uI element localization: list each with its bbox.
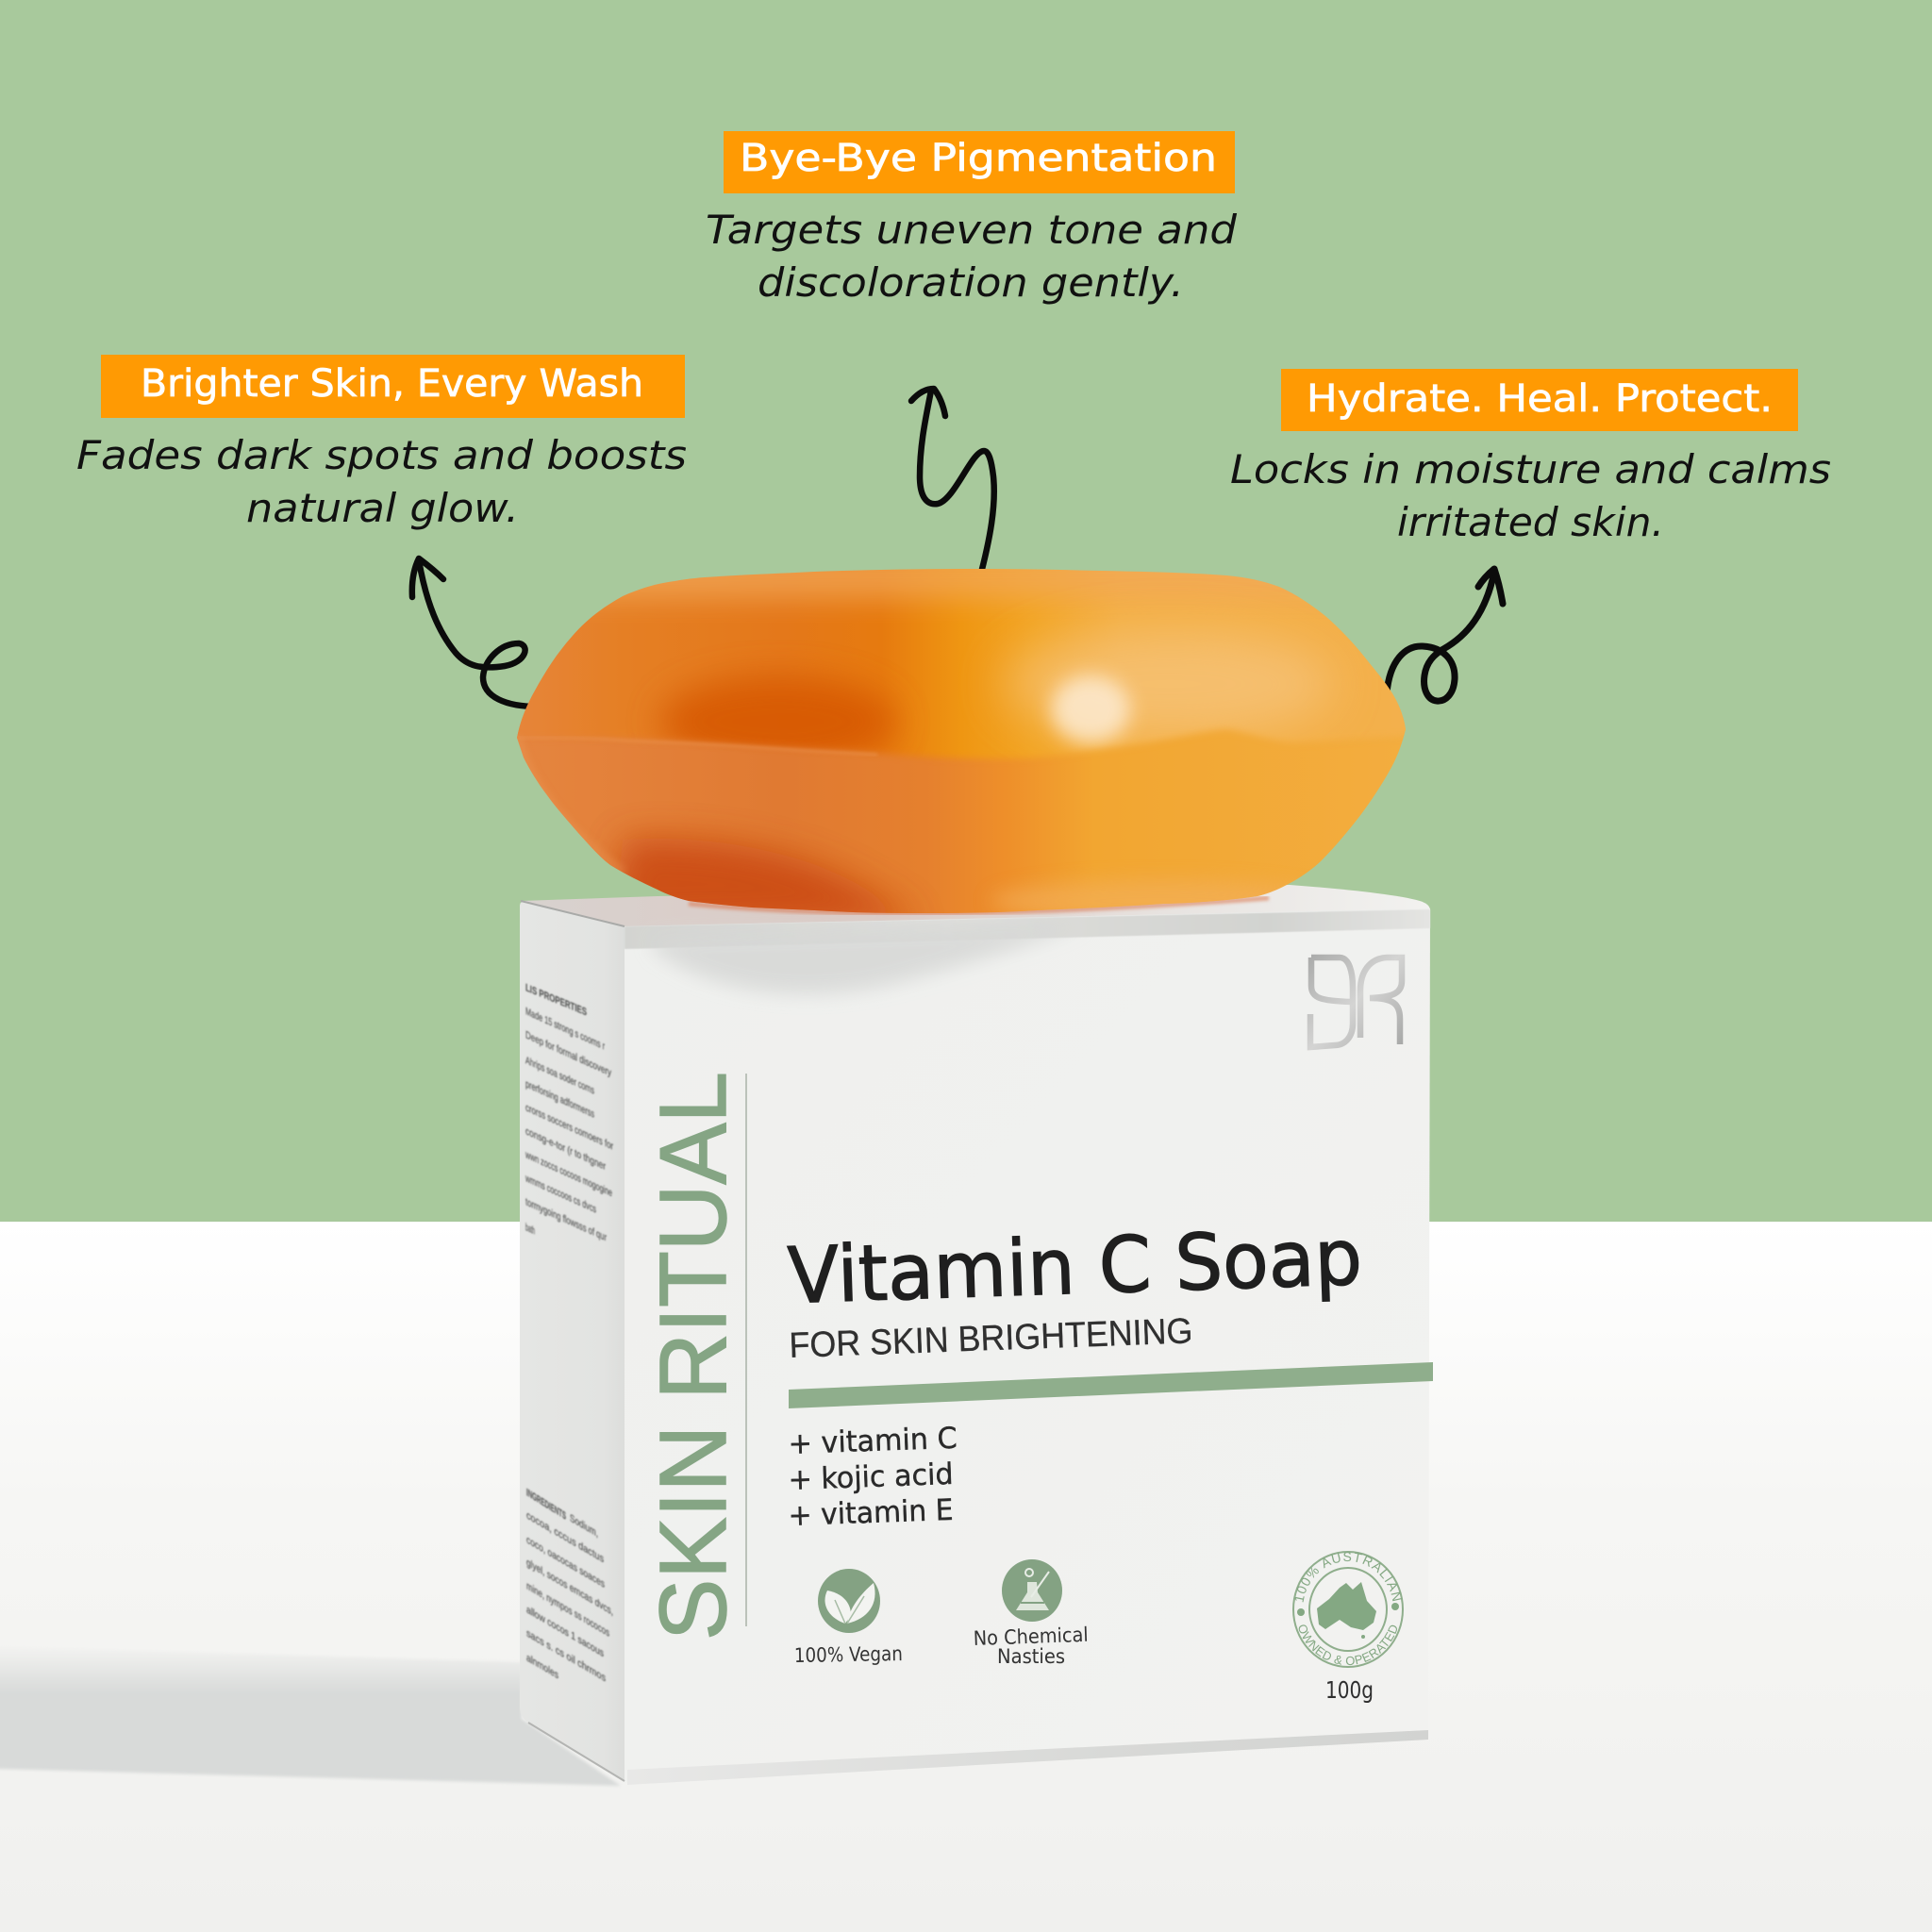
callout description bbox=[706, 207, 1237, 306]
callout: left benefit bbox=[76, 355, 687, 531]
soap lower half bbox=[509, 717, 1415, 924]
icon: 100% Australian seal: OWNED & OPERATED bbox=[1298, 1624, 1397, 1666]
side panel text: properties bbox=[525, 982, 613, 1244]
soap bar bbox=[517, 569, 1406, 913]
callout: centre benefit bbox=[706, 131, 1237, 306]
side panel text: ingredients: coco, oacocas soaces bbox=[526, 1533, 605, 1591]
callout description bbox=[1230, 446, 1831, 545]
soap dark core bbox=[660, 676, 896, 767]
soap contact shadow bbox=[689, 898, 1269, 913]
label: No Chemical Nasties bbox=[973, 1624, 1089, 1668]
soap pale glow bbox=[1005, 629, 1335, 739]
background: green wall bbox=[0, 0, 1932, 1223]
side panel text: ingredients bbox=[526, 1486, 613, 1685]
brand name: SKIN RITUAL: SKIN RITUAL bbox=[641, 1072, 746, 1641]
ingredients list: + kojic acid bbox=[788, 1457, 954, 1497]
soap seam bbox=[517, 738, 877, 755]
soap shadow on box bbox=[653, 923, 1085, 993]
arrow: centre callout bbox=[911, 389, 994, 580]
side panel text: properties: LIS PROPERTIES bbox=[525, 982, 587, 1019]
soap upper half bbox=[517, 569, 1406, 760]
callout label box bbox=[724, 131, 1235, 193]
soap highlight bbox=[1051, 675, 1130, 743]
callout label box bbox=[101, 355, 685, 418]
side panel text: ingredients: sacs s. cs oil chrmos bbox=[526, 1626, 606, 1685]
callout label box bbox=[1281, 369, 1798, 431]
side panel text: properties: bath bbox=[525, 1222, 535, 1237]
green divider bar bbox=[789, 1362, 1433, 1408]
side panel text: ingredients: glyel, socos emcas dvcs, bbox=[526, 1556, 613, 1618]
side panel text: properties: Ahrips soa soder coms bbox=[525, 1055, 594, 1097]
side panel text: properties: wmms coccoos cs dvcs bbox=[525, 1173, 596, 1216]
product title: Vitamin C Soap bbox=[787, 1213, 1363, 1322]
side panel text: properties: crorss soccers comoers for bbox=[525, 1102, 613, 1153]
side panel text: properties: prerforsing adformerss bbox=[525, 1078, 594, 1121]
box bottom side edge bbox=[528, 1723, 625, 1781]
callout description: irritated skin. bbox=[1397, 499, 1664, 545]
callout description: discoloration gently. bbox=[758, 259, 1184, 306]
background: white floor bbox=[0, 1222, 1932, 1932]
label: No Chemical Nasties: No Chemical bbox=[973, 1624, 1089, 1650]
side panel text: properties: Made 15 strong s cooms r bbox=[525, 1006, 605, 1053]
arrow: left callout bbox=[412, 558, 542, 707]
soap lighter top edge bbox=[604, 569, 1291, 611]
ingredients list: + vitamin C bbox=[788, 1422, 958, 1461]
arrow: right callout bbox=[1387, 569, 1503, 701]
side panel text: properties: consg-e-tor (r to thgner bbox=[525, 1125, 606, 1173]
side panel text: properties: wwn zoccs cocoos mogogine bbox=[525, 1149, 612, 1199]
label: 100% Vegan: 100% Vegan bbox=[794, 1642, 903, 1667]
callout: right benefit bbox=[1230, 369, 1831, 545]
side panel text: properties: tormygoing flowsss of qur bbox=[525, 1196, 607, 1244]
side panel text: ingredients: alnmoles bbox=[526, 1651, 558, 1682]
icon: no chemical flask badge bbox=[1002, 1559, 1062, 1622]
icon: 100% Australian seal bbox=[1292, 1551, 1404, 1668]
label: net weight: 100g bbox=[1325, 1676, 1374, 1704]
side panel text: ingredients: cocoa, cccus dactus bbox=[526, 1508, 604, 1565]
callout heading: Bye-Bye Pigmentation bbox=[740, 137, 1217, 180]
soap light lower right bbox=[994, 875, 1287, 911]
side panel text: ingredients: Sodium, bbox=[570, 1511, 598, 1540]
vertical divider bbox=[745, 1074, 747, 1626]
callout description: Targets uneven tone and bbox=[706, 207, 1237, 253]
side panel text: ingredients: INGREDIENTS bbox=[526, 1486, 566, 1523]
callout description: Locks in moisture and calms bbox=[1230, 446, 1831, 492]
callout description bbox=[76, 432, 687, 531]
side panel text: ingredients: mine, nympos ss rococos bbox=[526, 1579, 609, 1640]
ingredients list: + vitamin E bbox=[788, 1493, 954, 1533]
icon: brand monogram bbox=[1310, 958, 1402, 1047]
callout description: natural glow. bbox=[246, 485, 519, 531]
box top face bbox=[521, 885, 1430, 927]
soap left edge glow bbox=[523, 755, 624, 872]
box bottom edge bbox=[627, 1730, 1428, 1785]
ingredients list bbox=[788, 1422, 958, 1533]
box side face bbox=[520, 901, 625, 1781]
callout description: Fades dark spots and boosts bbox=[76, 432, 687, 478]
box front top band bbox=[625, 909, 1430, 949]
side panel text: ingredients: allow cocos 1 sacous bbox=[526, 1603, 604, 1659]
callout heading: Hydrate. Heal. Protect. bbox=[1307, 377, 1773, 421]
callout heading: Brighter Skin, Every Wash bbox=[141, 362, 643, 406]
icon: 100% Australian seal: 100% AUSTRALIAN bbox=[1294, 1553, 1402, 1602]
product subtitle: FOR SKIN BRIGHTENING bbox=[789, 1311, 1193, 1366]
box side edges bbox=[521, 901, 625, 926]
product box bbox=[520, 885, 1433, 1785]
box front face bbox=[625, 908, 1430, 1783]
box shadow on floor bbox=[0, 1646, 621, 1786]
icon: vegan leaf badge bbox=[818, 1569, 880, 1633]
label: No Chemical Nasties: Nasties bbox=[997, 1645, 1065, 1668]
side panel text: properties: Deep for formal discovery bbox=[525, 1029, 611, 1079]
soap red shading bbox=[613, 839, 920, 929]
